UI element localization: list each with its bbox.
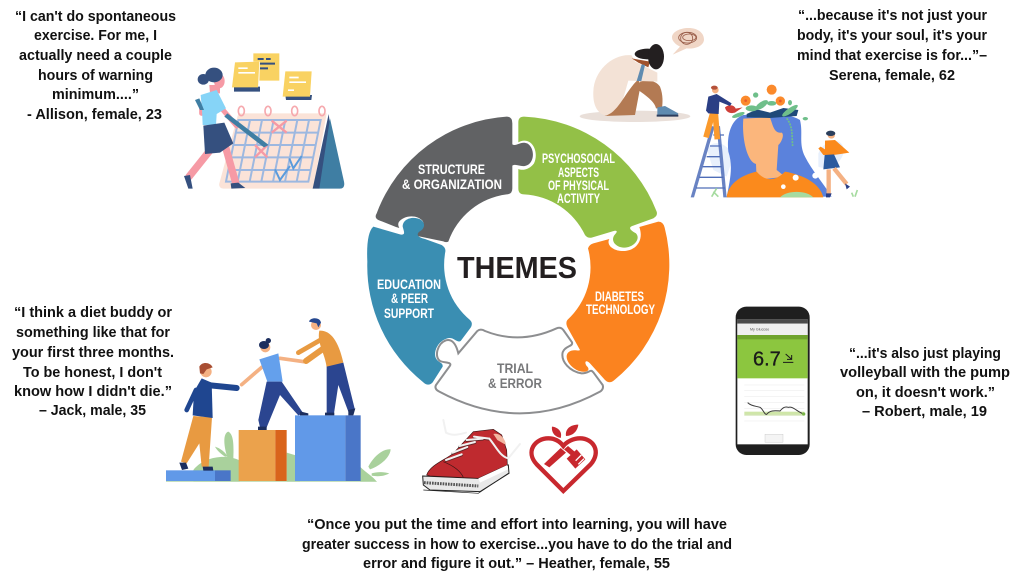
quote: Heather: greater success in how to exercise...you have to do the trial and [302, 536, 732, 553]
piece: trial and error: & ERROR [488, 376, 542, 391]
quote: Allison: hours of warning [38, 67, 153, 84]
illustration: sad person with thought bubble [580, 28, 704, 122]
quote: Jack: your first three months. [12, 344, 174, 361]
themes puzzle wheel [367, 117, 669, 413]
piece: structure and organization [376, 117, 533, 242]
quote: Serena: Serena, female, 62 [829, 67, 955, 84]
icon: heart with fork and knife [532, 425, 596, 491]
quote: Jack: something like that for [16, 324, 170, 341]
piece: education and peer support: & PEER [391, 291, 428, 306]
piece: structure and organization: STRUCTURE [418, 162, 485, 177]
quote: Heather [302, 516, 732, 572]
quote: Allison: “I can't do spontaneous [15, 8, 176, 25]
heading: themes: THEMES [457, 250, 577, 285]
piece: education and peer support: SUPPORT [384, 306, 435, 321]
quote: Robert: on, it doesn't work.” [856, 384, 995, 401]
quote: Heather: error and figure it out.” – Heather, female, 55 [363, 555, 670, 572]
quote: Serena: “...because it's not just your [798, 7, 987, 24]
illustration: woman with calendar [184, 53, 344, 189]
illustration: red sneaker [423, 420, 520, 493]
quote: Jack: “I think a diet buddy or [14, 304, 172, 321]
quote: Jack: know how I didn't die.” [14, 383, 172, 400]
piece: trial and error [435, 328, 603, 413]
quote: Serena [797, 7, 987, 84]
illustration: people helping each other climb [166, 318, 391, 482]
piece: diabetes technology [566, 222, 669, 382]
quote: Jack: To be honest, I don't [23, 364, 162, 381]
piece: psychosocial aspects of physical activity [518, 117, 657, 248]
quote: Serena: mind that exercise is for...”– [797, 47, 987, 64]
piece: education and peer support: EDUCATION [377, 277, 441, 292]
piece: psychosocial aspects of physical activity: ACTIVITY [557, 191, 600, 206]
piece: education and peer support [367, 218, 472, 385]
quote: Allison: - Allison, female, 23 [27, 106, 162, 123]
quote: Allison: exercise. For me, I [34, 27, 157, 44]
illustration: phone with glucose reading: My Glucose [750, 328, 769, 332]
quote: Jack [12, 304, 174, 419]
quote: Robert: “...it's also just playing [849, 345, 1001, 362]
piece: structure and organization: & ORGANIZATION [402, 177, 502, 192]
piece: psychosocial aspects of physical activity: OF PHYSICAL [548, 178, 609, 193]
quote: Jack: – Jack, male, 35 [39, 402, 146, 419]
quote: Allison [15, 8, 176, 123]
quote: Robert: volleyball with the pump [840, 364, 1010, 381]
piece: psychosocial aspects of physical activity: ASPECTS [558, 165, 599, 180]
quote: Robert: – Robert, male, 19 [862, 403, 987, 420]
piece: diabetes technology: DIABETES [595, 289, 644, 304]
illustration: phone with glucose reading [736, 307, 810, 455]
quote: Heather: “Once you put the time and effort into learning, you will have [307, 516, 727, 533]
piece: trial and error: TRIAL [497, 361, 533, 376]
reading: 6.7: 6.7 [753, 349, 781, 371]
piece: diabetes technology: TECHNOLOGY [586, 302, 655, 317]
quote: Robert [840, 345, 1010, 420]
piece: psychosocial aspects of physical activity: PSYCHOSOCIAL [542, 151, 615, 166]
quote: Serena: body, it's your soul, it's your [797, 27, 987, 44]
quote: Allison: minimum....” [52, 86, 139, 103]
illustration: head with garden [691, 85, 857, 197]
quote: Allison: actually need a couple [19, 47, 172, 64]
